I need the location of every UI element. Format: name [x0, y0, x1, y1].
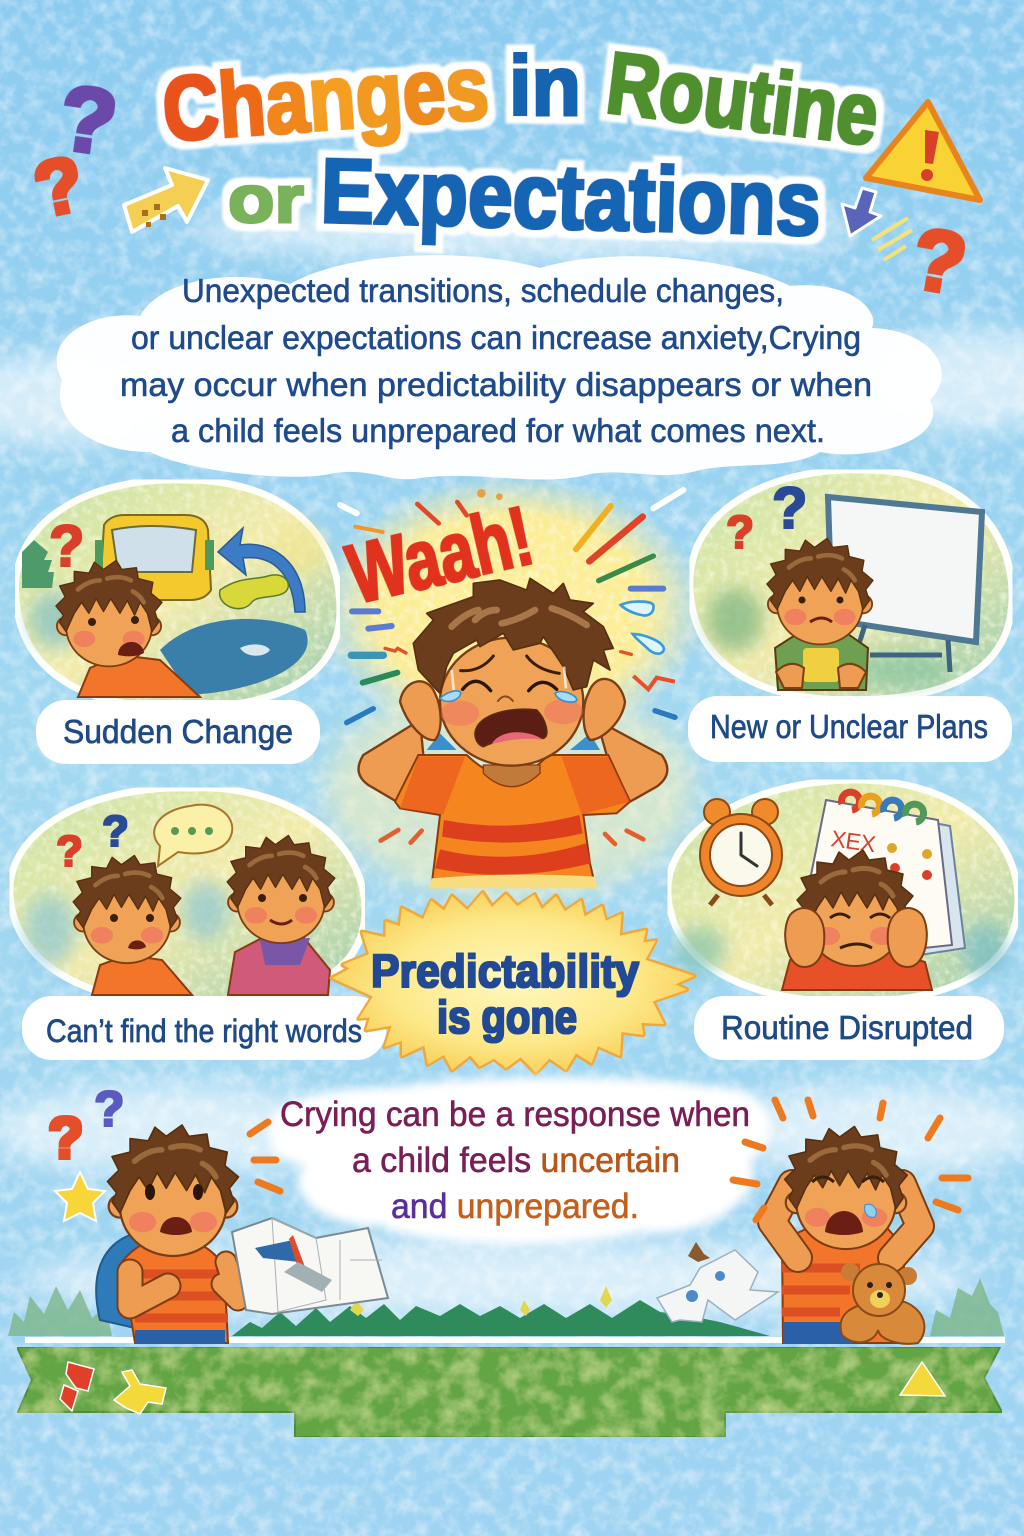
label: Can't find the right words: [22, 996, 386, 1060]
question marks: [56, 807, 129, 876]
question marks: [726, 476, 807, 558]
small brown chip: [688, 1242, 710, 1262]
intro text: may occur when predictability disappears or when: [120, 366, 872, 403]
foliage strip: [8, 1278, 1004, 1336]
arms: [359, 720, 667, 802]
left foliage: [22, 540, 54, 588]
label: Routine Disrupted: Routine Disrupted: [721, 1009, 973, 1046]
speech bubble: [154, 805, 232, 866]
title line 1: Changes: [159, 36, 492, 161]
bottom left boy: [48, 1081, 280, 1344]
shirt: [395, 755, 630, 888]
icon: red question mark: ?: [27, 138, 91, 234]
callout: predictability is gone: [314, 882, 712, 1083]
whiteboard: [828, 497, 982, 672]
label: Routine Disrupted: [694, 996, 1004, 1060]
intro text: Unexpected transitions, schedule changes,: [182, 272, 784, 309]
boy: [782, 850, 932, 990]
alarm clock: [700, 799, 782, 905]
title line 2: Expectations: [319, 140, 822, 255]
calendar: XEX: [829, 825, 877, 857]
intro text: a child feels unprepared for what comes next.: [171, 412, 825, 449]
bottom right boy: [733, 1100, 968, 1344]
title line 1: in: [509, 39, 581, 133]
label: Can't find the right words: Can’t find the right words: [46, 1013, 362, 1049]
label: Sudden Change: Sudden Change: [63, 713, 293, 750]
school bus: [95, 515, 214, 600]
panel: can't find the right words: [10, 788, 386, 1060]
message text: Crying can be a response when: [280, 1095, 750, 1134]
bottom left boy: ?: [94, 1081, 125, 1137]
puzzle piece: [657, 1250, 778, 1322]
panel: intro cloud: [57, 255, 942, 480]
intro text: or unclear expectations can increase anxiety,Crying: [131, 319, 861, 356]
boy: [767, 538, 873, 690]
calendar: [810, 792, 965, 955]
callout: predictability is gone: Predictability: [371, 945, 639, 997]
question marks: ?: [102, 807, 129, 856]
icon: yellow arrow: [124, 168, 208, 232]
label: New or Unclear Plans: New or Unclear Plans: [710, 708, 988, 745]
blue backing: [427, 733, 600, 750]
bottom left boy: ?: [48, 1106, 83, 1171]
scene colour patches: [29, 524, 324, 648]
burst lines: [340, 490, 683, 844]
question marks: ?: [56, 827, 83, 876]
scene colour patches: [707, 588, 950, 686]
tear drops: [621, 601, 664, 654]
grass banner: [17, 1340, 1005, 1437]
green splash: [220, 575, 288, 609]
curved arrow: [218, 528, 305, 612]
scene colour patches: [674, 922, 1007, 978]
panel: central crying boy: [317, 475, 707, 900]
panel: bottom message cloud: [269, 1077, 771, 1245]
icon: yellow puzzle: [114, 1370, 166, 1414]
question mark: ?: [49, 514, 84, 579]
callout: predictability is gone: is gone: [437, 991, 577, 1043]
panel: sudden change: [15, 480, 340, 764]
title line 2: or: [228, 162, 304, 236]
burst dashes: [250, 1122, 280, 1191]
question marks: ?: [772, 476, 807, 541]
zigzag: [633, 676, 675, 689]
blue road: [160, 619, 308, 695]
boy left: [73, 855, 192, 995]
title line 1: Routine: [602, 33, 884, 164]
Waah exclamation: Waah!: [339, 488, 541, 622]
icon: yellow triangle: [900, 1362, 945, 1396]
icon: purple question mark: ?: [53, 66, 123, 175]
icon: small purple arrow: [842, 188, 881, 236]
title: [159, 33, 884, 255]
label: New or Unclear Plans: [688, 696, 1012, 762]
scene colour patches: [24, 880, 229, 966]
boy right: [227, 835, 335, 995]
title line 1: [159, 33, 884, 164]
icon: warning triangle: [866, 102, 980, 200]
neck: [483, 765, 540, 787]
icon: yellow dashes: [872, 218, 912, 260]
open book and megaphone: [232, 1218, 388, 1314]
burst dashes: [733, 1100, 968, 1220]
icon: red pin: [60, 1362, 94, 1411]
teddy bear: [841, 1263, 924, 1344]
head: [413, 578, 613, 766]
intro text: [120, 272, 872, 449]
question marks: ?: [726, 506, 754, 558]
boy: [56, 560, 200, 697]
message text: [280, 1095, 750, 1226]
hands: [400, 679, 625, 740]
panel: new or unclear plans: [688, 470, 1012, 762]
message text: a child feels uncertain: [352, 1141, 680, 1180]
message text: and unprepared.: [391, 1187, 639, 1226]
icon: lower red question mark: ?: [905, 210, 973, 314]
panel: routine disrupted: [668, 780, 1018, 1060]
label: Sudden Change: [36, 700, 320, 764]
